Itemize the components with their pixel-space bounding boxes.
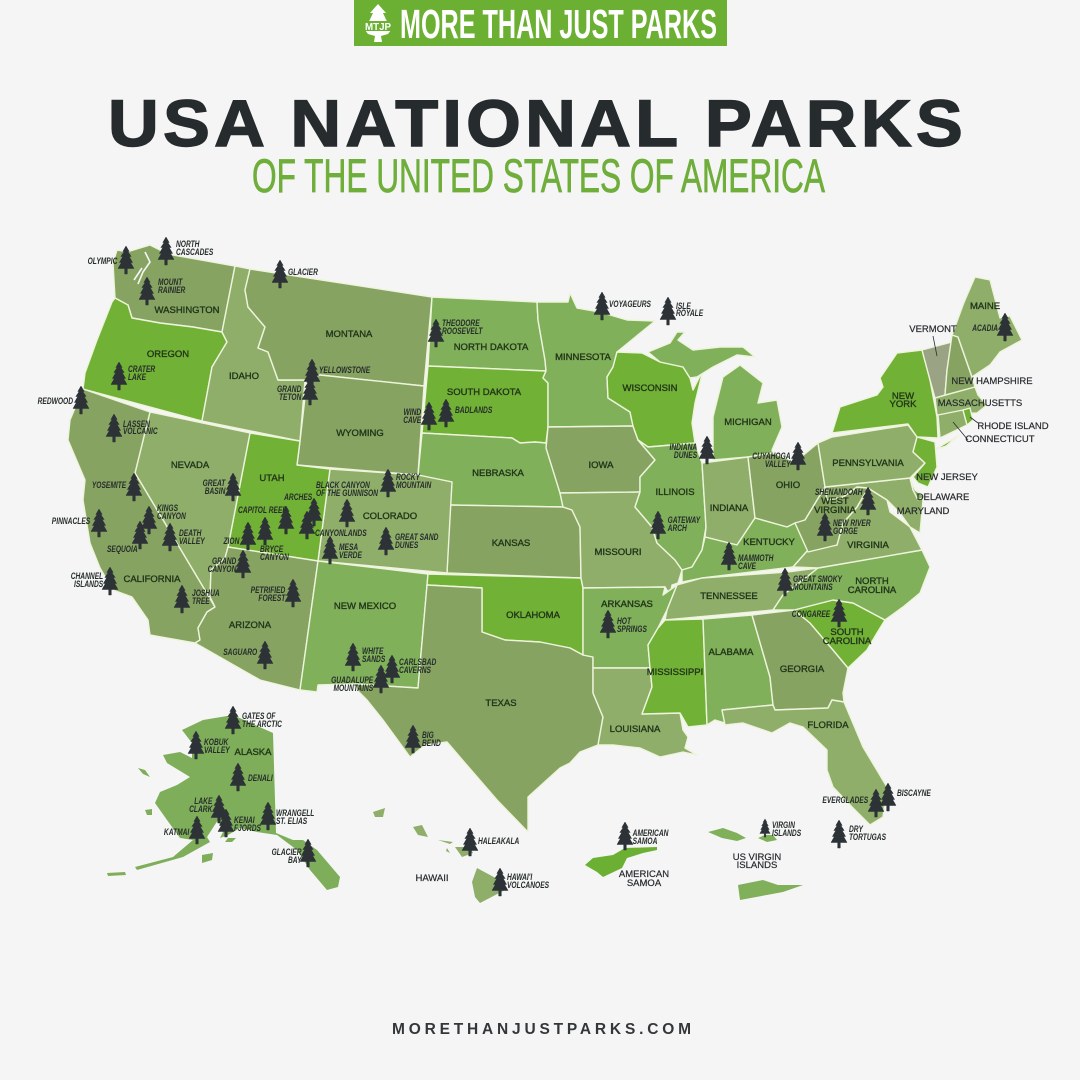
park: Great Sand Dunes bbox=[378, 527, 438, 555]
park: Badlands bbox=[438, 399, 493, 427]
label: Mississippi: MISSISSIPPI bbox=[647, 667, 703, 678]
label: North Carolina: NORTH bbox=[855, 576, 889, 587]
state: California bbox=[68, 389, 215, 643]
park: Capitol Reef: CAPITOL REEF bbox=[238, 505, 287, 515]
label: South Carolina: CAROLINA bbox=[823, 636, 872, 647]
label: Iowa: IOWA bbox=[589, 460, 614, 471]
label: South Dakota: SOUTH DAKOTA bbox=[447, 387, 522, 398]
park: Great Basin: BASIN bbox=[205, 486, 226, 496]
park: Congaree: CONGAREE bbox=[792, 609, 831, 619]
state: Indiana bbox=[702, 457, 755, 545]
label: Minnesota: MINNESOTA bbox=[555, 352, 612, 363]
park: Gates of the Arctic bbox=[225, 706, 283, 734]
park: Canyonlands bbox=[299, 511, 367, 539]
label: Maryland: MARYLAND bbox=[897, 506, 949, 517]
leader lines: Vermont, Rhode Island, Connecticut bbox=[933, 336, 978, 440]
state: West Virginia bbox=[795, 487, 868, 552]
park: Hawai'i Volcanoes: HAWAI'I bbox=[507, 872, 533, 882]
state: Massachusetts bbox=[935, 387, 987, 415]
park: Crater Lake: LAKE bbox=[128, 372, 147, 382]
park: Black Canyon of the Gunnison: BLACK CANYON bbox=[316, 480, 371, 490]
park: Everglades bbox=[822, 789, 884, 817]
state: Alaska bbox=[135, 715, 340, 890]
park: Biscayne bbox=[880, 783, 931, 811]
label: South Carolina: SOUTH bbox=[830, 627, 864, 638]
state: New Hampshire bbox=[945, 335, 975, 395]
park: Mesa Verde: VERDE bbox=[339, 550, 362, 560]
park: Dry Tortugas: DRY bbox=[849, 824, 864, 834]
park: Wind Cave: CAVE bbox=[403, 415, 422, 425]
state: Tennessee bbox=[665, 568, 818, 620]
state: Illinois bbox=[635, 440, 706, 570]
park: Petrified Forest: PETRIFIED bbox=[251, 585, 285, 595]
park: Wind Cave bbox=[403, 402, 437, 430]
American Samoa island bbox=[585, 847, 657, 877]
park: Yosemite: YOSEMITE bbox=[92, 480, 127, 490]
park: Black Canyon of the Gunnison bbox=[316, 480, 379, 527]
park: Glacier Bay: BAY bbox=[288, 855, 303, 865]
label: New Mexico: NEW MEXICO bbox=[334, 601, 396, 612]
park: Bryce Canyon: BRYCE bbox=[260, 544, 284, 554]
park: Sequoia: SEQUOIA bbox=[107, 544, 138, 554]
label: Nevada: NEVADA bbox=[171, 460, 210, 471]
state: Kentucky bbox=[682, 518, 808, 582]
park: Haleakala bbox=[462, 828, 519, 856]
state: Washington bbox=[113, 245, 235, 332]
park: White Sands: SANDS bbox=[362, 654, 386, 664]
state: Nevada bbox=[135, 412, 250, 607]
park: Hawai'i Volcanoes bbox=[492, 868, 549, 896]
park: Capitol Reef bbox=[238, 505, 294, 534]
park: Grand Canyon bbox=[208, 550, 251, 578]
park: Theodore Roosevelt bbox=[428, 318, 483, 347]
park: Wrangell St. Elias: WRANGELL bbox=[276, 808, 314, 818]
park: Cuyahoga Valley: CUYAHOGA bbox=[752, 451, 791, 461]
state: Kansas bbox=[447, 505, 581, 578]
state: South Dakota bbox=[422, 366, 548, 443]
label: Kansas: KANSAS bbox=[492, 538, 530, 549]
park: Rocky Mountain: ROCKY bbox=[396, 472, 421, 482]
park: Crater Lake: CRATER bbox=[128, 364, 155, 374]
park: Lassen Volcanic bbox=[106, 414, 159, 442]
label: Rhode Island: RHODE ISLAND bbox=[977, 421, 1049, 432]
label: Nebraska: NEBRASKA bbox=[472, 468, 525, 479]
park: Kenai Fjords: KENAI bbox=[234, 815, 255, 825]
park: Virgin Islands bbox=[760, 819, 802, 838]
Alaska islands bbox=[107, 768, 236, 876]
park: Death Valley: DEATH bbox=[179, 528, 202, 538]
state: Alabama bbox=[703, 615, 773, 725]
park: Bryce Canyon bbox=[257, 517, 290, 562]
Puget Sound bbox=[134, 252, 150, 284]
park: Channel Islands: CHANNEL bbox=[71, 571, 103, 581]
state: Georgia bbox=[752, 610, 848, 710]
park: Dry Tortugas: TORTUGAS bbox=[849, 832, 886, 842]
park: American Samoa bbox=[617, 822, 669, 850]
park: Redwood: REDWOOD bbox=[38, 396, 73, 406]
park: Glacier: GLACIER bbox=[288, 267, 318, 277]
park: Saguaro: SAGUARO bbox=[223, 647, 258, 657]
park: Kings Canyon bbox=[141, 503, 187, 534]
Virgin Islands bbox=[708, 828, 803, 900]
label: Idaho: IDAHO bbox=[229, 371, 259, 382]
map: United States bbox=[68, 245, 1022, 903]
park: Carlsbad Caverns: CARLSBAD bbox=[399, 657, 436, 667]
park: Great Smoky Mountains bbox=[777, 568, 843, 596]
park: Gateway Arch: ARCH bbox=[667, 523, 688, 533]
label: Oregon: OREGON bbox=[147, 349, 189, 360]
state: Idaho bbox=[202, 266, 305, 441]
park: Gates of the Arctic: THE ARCTIC bbox=[242, 719, 283, 729]
label: West Virginia: WEST bbox=[821, 496, 849, 507]
park: Mount Rainier: RAINIER bbox=[158, 285, 185, 295]
park: Big Bend: BIG bbox=[422, 730, 434, 740]
banner: More Than Just Parks: MORE THAN JUST PARKS bbox=[400, 1, 717, 47]
state: Iowa bbox=[546, 426, 655, 493]
park: Yosemite bbox=[92, 473, 142, 501]
park: Theodore Roosevelt: THEODORE bbox=[442, 318, 480, 328]
park: Kobuk Valley bbox=[188, 731, 231, 759]
label: Maine: MAINE bbox=[970, 301, 1000, 312]
state: Delaware bbox=[910, 478, 925, 500]
label: Wyoming: WYOMING bbox=[336, 428, 384, 439]
park: Glacier Bay bbox=[272, 839, 316, 867]
park: American Samoa: AMERICAN bbox=[632, 828, 669, 838]
state: Michigan lower bbox=[713, 365, 782, 460]
label: Oklahoma: OKLAHOMA bbox=[506, 610, 561, 621]
state: Mississippi bbox=[642, 619, 707, 727]
label: American Samoa: SAMOA bbox=[627, 878, 662, 889]
park: Glacier Bay: GLACIER bbox=[272, 847, 302, 857]
park: Petrified Forest: FOREST bbox=[258, 593, 286, 603]
park: Kobuk Valley: KOBUK bbox=[204, 737, 229, 747]
park: Redwood bbox=[38, 386, 89, 414]
park: Zion bbox=[223, 522, 256, 550]
park: Glacier bbox=[272, 260, 318, 288]
park: New River Gorge bbox=[817, 513, 871, 541]
park: Pinnacles bbox=[52, 509, 107, 537]
park: Olympic bbox=[88, 246, 134, 274]
park: Indiana Dunes bbox=[670, 436, 715, 464]
park: North Cascades bbox=[158, 237, 214, 265]
park: Lake Clark bbox=[189, 795, 227, 823]
state: Maine bbox=[952, 277, 1022, 377]
park: Wind Cave: WIND bbox=[403, 407, 421, 417]
banner: More Than Just Parks bbox=[354, 0, 727, 47]
park: Mammoth Cave: CAVE bbox=[738, 561, 756, 571]
park: Hot Springs: SPRINGS bbox=[617, 624, 647, 634]
park: Virgin Islands: VIRGIN bbox=[772, 820, 796, 830]
park: Bryce Canyon: CANYON bbox=[260, 552, 290, 562]
park: Denali bbox=[230, 763, 273, 791]
park: Hawai'i Volcanoes: VOLCANOES bbox=[507, 880, 549, 890]
state: Utah bbox=[228, 433, 330, 561]
state: New York bbox=[832, 350, 938, 438]
park: Shenandoah: SHENANDOAH bbox=[815, 487, 863, 497]
park: Great Sand Dunes: DUNES bbox=[395, 540, 419, 550]
park: Saguaro bbox=[223, 641, 273, 669]
park: Kings Canyon: KINGS bbox=[157, 503, 178, 513]
park: Kobuk Valley: VALLEY bbox=[204, 745, 231, 755]
label: Arizona: ARIZONA bbox=[229, 620, 272, 631]
park: Indiana Dunes: INDIANA bbox=[670, 442, 697, 452]
park: Big Bend bbox=[405, 725, 441, 753]
park: Great Basin: GREAT bbox=[203, 478, 226, 488]
park: Wrangell St. Elias bbox=[260, 802, 314, 830]
park: Shenandoah bbox=[815, 487, 876, 515]
park: Carlsbad Caverns bbox=[384, 655, 436, 683]
state: Virginia bbox=[793, 488, 922, 568]
state: South Carolina bbox=[794, 600, 885, 668]
subtitle: OF THE UNITED STATES OF AMERICA bbox=[252, 149, 825, 202]
state labels bbox=[123, 301, 1049, 889]
park: Mount Rainier bbox=[139, 277, 185, 305]
state: Vermont bbox=[922, 342, 952, 398]
label: Alabama: ALABAMA bbox=[709, 647, 754, 658]
state: Pennsylvania bbox=[818, 425, 925, 487]
label: New York: YORK bbox=[890, 399, 917, 410]
state: Maryland bbox=[825, 478, 923, 533]
label: Arkansas: ARKANSAS bbox=[601, 599, 653, 610]
park: Great Sand Dunes: GREAT SAND bbox=[395, 532, 438, 542]
label: US Virgin Islands: ISLANDS bbox=[737, 860, 777, 871]
label: Washington: WASHINGTON bbox=[155, 305, 220, 316]
label: Florida: FLORIDA bbox=[807, 720, 849, 731]
park: North Cascades: CASCADES bbox=[176, 247, 214, 257]
park: Isle Royale bbox=[660, 297, 704, 325]
park: Pinnacles: PINNACLES bbox=[52, 516, 91, 526]
park: Virgin Islands: ISLANDS bbox=[772, 828, 802, 838]
park: White Sands: WHITE bbox=[362, 646, 384, 656]
state: Connecticut bbox=[938, 410, 967, 438]
park: Lake Clark: LAKE bbox=[194, 796, 213, 806]
label: Kentucky: KENTUCKY bbox=[743, 537, 796, 548]
state: New Mexico bbox=[300, 561, 428, 692]
label: Pennsylvania: PENNSYLVANIA bbox=[832, 458, 904, 469]
park: Zion: ZION bbox=[223, 536, 240, 546]
icon: MTJP arrowhead logo: MTJP bbox=[365, 21, 391, 33]
label: Missouri: MISSOURI bbox=[595, 547, 641, 558]
park: Lassen Volcanic: VOLCANIC bbox=[123, 426, 159, 436]
state: Texas bbox=[355, 585, 603, 832]
park: Mount Rainier: MOUNT bbox=[158, 277, 183, 287]
state: Colorado bbox=[318, 469, 452, 573]
label: Michigan: MICHIGAN bbox=[724, 417, 772, 428]
label: Delaware: DELAWARE bbox=[917, 492, 969, 503]
park: Grand Teton: TETON bbox=[279, 392, 302, 402]
park: Gates of the Arctic: GATES OF bbox=[242, 711, 276, 721]
park: Joshua Tree bbox=[174, 585, 220, 613]
label: Texas: TEXAS bbox=[485, 698, 517, 709]
label: American Samoa: AMERICAN bbox=[619, 869, 669, 880]
park: Everglades: EVERGLADES bbox=[822, 795, 869, 805]
label: Indiana: INDIANA bbox=[710, 503, 749, 514]
icon: MTJP arrowhead logo bbox=[363, 4, 393, 42]
park: Yellowstone bbox=[304, 359, 371, 387]
state: Wyoming bbox=[297, 375, 424, 475]
park: Wrangell St. Elias: ST. ELIAS bbox=[276, 816, 308, 826]
park: American Samoa: SAMOA bbox=[633, 836, 657, 846]
park: New River Gorge: NEW RIVER bbox=[833, 518, 871, 528]
park: Death Valley bbox=[162, 523, 206, 551]
state: Wisconsin bbox=[607, 352, 703, 447]
park: New River Gorge: GORGE bbox=[833, 526, 858, 536]
park: Rocky Mountain bbox=[380, 469, 432, 497]
park: Canyonlands: CANYONLANDS bbox=[315, 528, 367, 538]
label: Wisconsin: WISCONSIN bbox=[623, 383, 678, 394]
label: Ohio: OHIO bbox=[776, 480, 800, 491]
park: Joshua Tree: JOSHUA bbox=[192, 588, 220, 598]
park: Acadia bbox=[971, 313, 1013, 341]
state: Ohio bbox=[748, 443, 825, 527]
label: US Virgin Islands: US VIRGIN bbox=[733, 852, 781, 863]
park: Grand Canyon: CANYON bbox=[208, 564, 237, 574]
label: California: CALIFORNIA bbox=[123, 574, 181, 585]
park: Katmai bbox=[164, 816, 205, 844]
park: Biscayne: BISCAYNE bbox=[897, 788, 931, 798]
state: North Dakota bbox=[428, 297, 546, 371]
park: Channel Islands: ISLANDS bbox=[74, 579, 104, 589]
state: Oregon bbox=[83, 298, 227, 421]
label: North Dakota: NORTH DAKOTA bbox=[454, 342, 529, 353]
park: Death Valley: VALLEY bbox=[179, 536, 206, 546]
park: Isle Royale: ROYALE bbox=[676, 308, 704, 318]
park: Hot Springs bbox=[600, 610, 647, 638]
park: Rocky Mountain: MOUNTAIN bbox=[396, 480, 432, 490]
park: Lake Clark: CLARK bbox=[189, 804, 213, 814]
park: Big Bend: BEND bbox=[422, 738, 441, 748]
park: Kenai Fjords: FJORDS bbox=[234, 823, 261, 833]
label: Georgia: GEORGIA bbox=[780, 664, 825, 675]
park: Great Smoky Mountains: MOUNTAINS bbox=[793, 582, 833, 592]
label: West Virginia: VIRGINIA bbox=[814, 505, 857, 516]
park: Indiana Dunes: DUNES bbox=[674, 450, 698, 460]
label: Illinois: ILLINOIS bbox=[655, 487, 695, 498]
park: Acadia: ACADIA bbox=[971, 323, 998, 333]
park: Haleakala: HALEAKALA bbox=[478, 836, 519, 846]
park: Yellowstone: YELLOWSTONE bbox=[319, 365, 371, 375]
state: Rhode Island bbox=[963, 408, 973, 425]
label: Colorado: COLORADO bbox=[363, 511, 417, 522]
park: Crater Lake bbox=[111, 362, 155, 390]
label: New Jersey: NEW JERSEY bbox=[916, 472, 979, 483]
label: Alaska: ALASKA bbox=[235, 747, 272, 758]
park: Mesa Verde: MESA bbox=[339, 542, 358, 552]
park: Cuyahoga Valley bbox=[752, 442, 806, 470]
park: Voyageurs bbox=[594, 292, 651, 320]
park: Gateway Arch: GATEWAY bbox=[668, 515, 701, 525]
park: Mammoth Cave: MAMMOTH bbox=[738, 553, 774, 563]
park: Arches bbox=[283, 492, 322, 526]
park: Mammoth Cave bbox=[721, 542, 774, 571]
park: White Sands bbox=[345, 643, 386, 671]
park: Sequoia bbox=[107, 521, 148, 554]
park: Grand Teton: GRAND bbox=[277, 384, 301, 394]
state: Arizona bbox=[195, 547, 318, 690]
state: Florida bbox=[722, 700, 887, 825]
park: Joshua Tree: TREE bbox=[192, 596, 210, 606]
state: Nebraska bbox=[418, 433, 563, 507]
label: Vermont: VERMONT bbox=[909, 324, 957, 335]
label: Louisiana: LOUISIANA bbox=[610, 724, 661, 735]
park: Guadalupe Mountains: GUADALUPE bbox=[331, 675, 374, 685]
park: Theodore Roosevelt: ROOSEVELT bbox=[442, 326, 483, 336]
label: Virginia: VIRGINIA bbox=[847, 540, 890, 551]
state: New Jersey bbox=[913, 437, 937, 487]
label: North Carolina: CAROLINA bbox=[848, 585, 897, 596]
title: USA NATIONAL PARKS bbox=[108, 86, 967, 160]
label: Massachusetts: MASSACHUSETTS bbox=[938, 398, 1022, 409]
park: Katmai: KATMAI bbox=[164, 827, 190, 837]
park: Great Basin bbox=[203, 473, 241, 501]
park: Voyageurs: VOYAGEURS bbox=[609, 299, 651, 309]
park: Denali: DENALI bbox=[248, 773, 273, 783]
national park markers bbox=[38, 237, 1013, 896]
state: Arkansas bbox=[583, 585, 677, 668]
label: Tennessee: TENNESSEE bbox=[700, 591, 758, 602]
state: Minnesota bbox=[537, 293, 655, 427]
park: Badlands: BADLANDS bbox=[455, 405, 493, 415]
label: Utah: UTAH bbox=[259, 473, 285, 484]
state: Oklahoma bbox=[427, 574, 583, 655]
state: Montana bbox=[245, 269, 432, 386]
label: New Hampshire: NEW HAMPSHIRE bbox=[951, 376, 1033, 387]
park: Dry Tortugas bbox=[831, 820, 886, 848]
park: Channel Islands bbox=[71, 567, 118, 595]
label: New York: NEW bbox=[892, 391, 914, 402]
label: Hawaii: HAWAII bbox=[415, 873, 449, 884]
footer: website: MORETHANJUSTPARKS.COM bbox=[392, 1021, 691, 1038]
park: Guadalupe Mountains: MOUNTAINS bbox=[333, 683, 374, 693]
park: Kenai Fjords bbox=[218, 809, 261, 837]
label: Connecticut: CONNECTICUT bbox=[965, 434, 1035, 445]
park: Carlsbad Caverns: CAVERNS bbox=[399, 665, 431, 675]
Long Island bbox=[934, 436, 958, 450]
park: Isle Royale: ISLE bbox=[676, 301, 691, 311]
Hawaii islands bbox=[373, 808, 505, 903]
state: Missouri bbox=[560, 492, 682, 595]
park: Olympic: OLYMPIC bbox=[88, 256, 118, 266]
park: Mesa Verde bbox=[322, 536, 362, 564]
park: Kings Canyon: CANYON bbox=[157, 511, 187, 521]
state: North Carolina bbox=[773, 550, 930, 620]
park: Hot Springs: HOT bbox=[617, 616, 632, 626]
park: Lassen Volcanic: LASSEN bbox=[123, 419, 151, 429]
park: Arches: ARCHES bbox=[283, 492, 313, 502]
park: Gateway Arch bbox=[650, 511, 701, 539]
state: Michigan upper bbox=[648, 332, 755, 378]
label: Montana: MONTANA bbox=[326, 329, 373, 340]
park: North Cascades: NORTH bbox=[176, 239, 200, 249]
state: Louisiana bbox=[593, 668, 697, 757]
park: Petrified Forest bbox=[251, 579, 301, 607]
park: Grand Canyon: GRAND bbox=[212, 556, 236, 566]
park: Congaree bbox=[792, 599, 847, 627]
park: Cuyahoga Valley: VALLEY bbox=[765, 459, 792, 469]
park: Great Smoky Mountains: GREAT SMOKY bbox=[793, 574, 843, 584]
park: Black Canyon of the Gunnison: OF THE GUNNISON bbox=[316, 488, 379, 498]
park: Grand Teton bbox=[277, 377, 318, 405]
park: Guadalupe Mountains bbox=[331, 665, 389, 693]
